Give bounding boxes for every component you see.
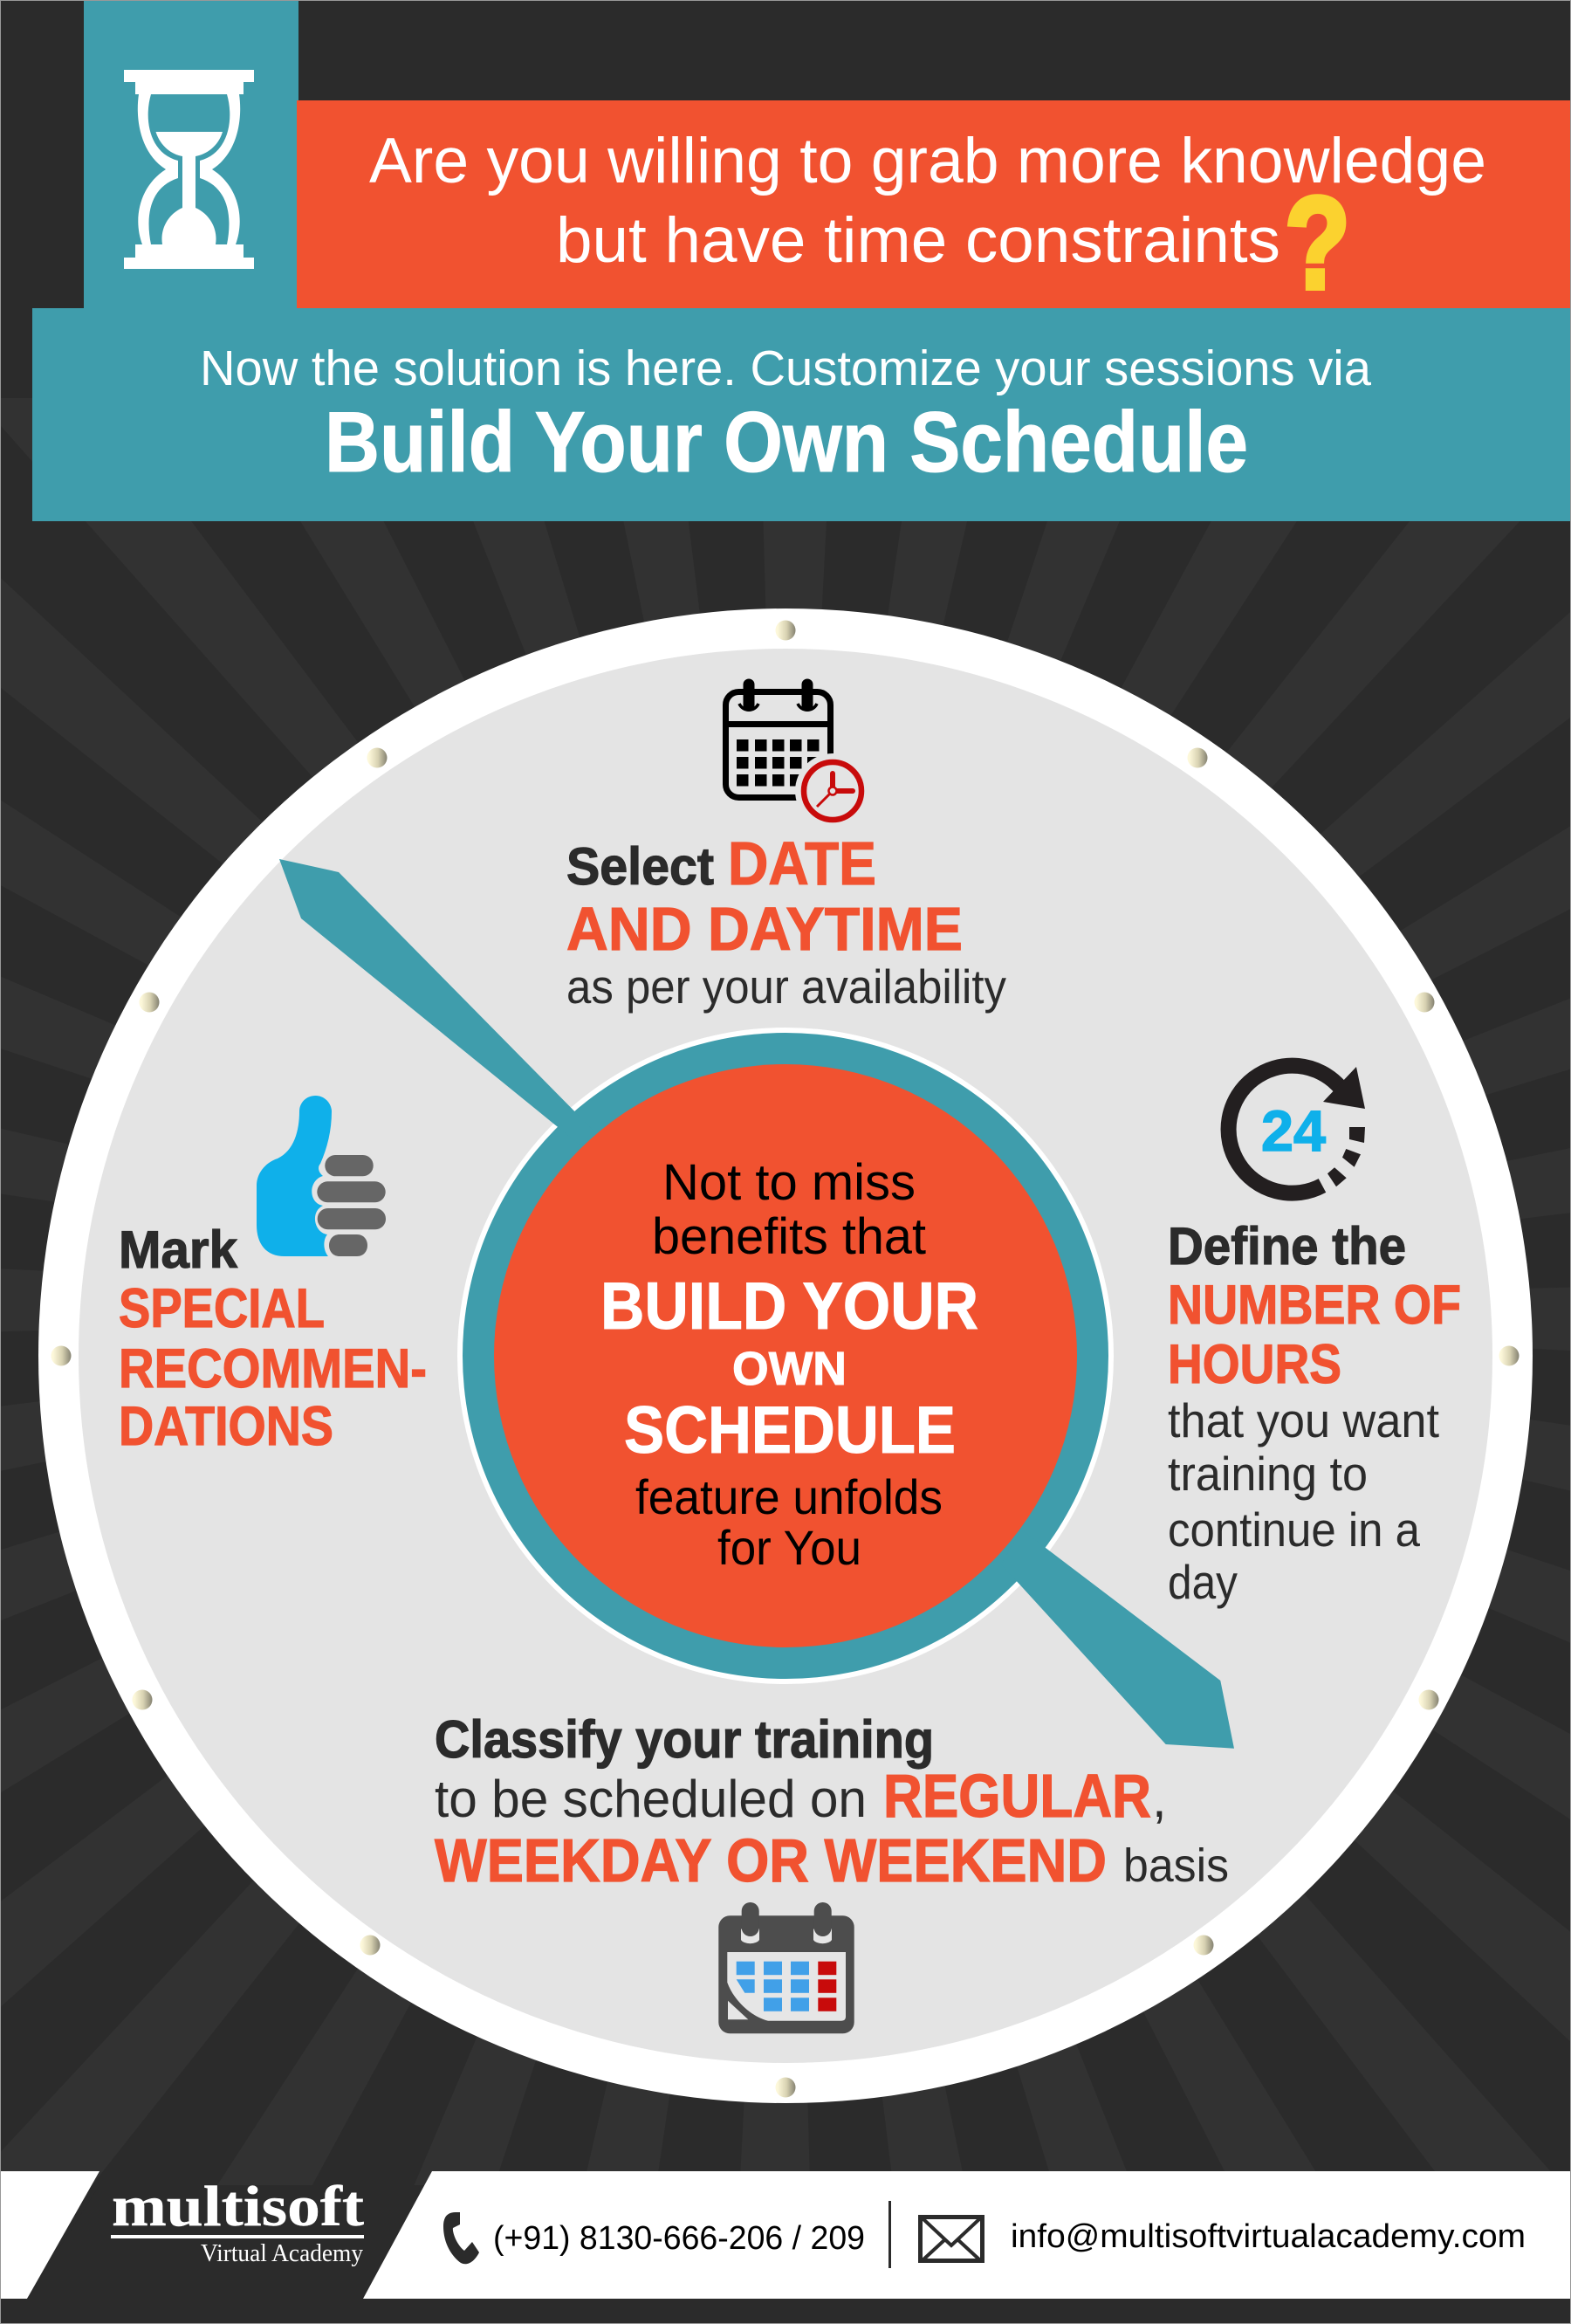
logo: multisoft bbox=[112, 2175, 364, 2238]
description: regular bbox=[435, 1762, 1167, 1830]
footer bbox=[0, 2171, 1571, 2324]
description: hours: training to bbox=[1168, 1447, 1368, 1501]
center text: SCHEDULE bbox=[624, 1393, 956, 1468]
section: recommendations: RECOMMEN- bbox=[119, 1338, 427, 1399]
center text: feature unfolds bbox=[635, 1469, 943, 1524]
description: availability: as per your availability bbox=[566, 959, 1006, 1014]
section: select date: AND DAYTIME bbox=[566, 895, 963, 963]
description: weekday or weekend: WEEKDAY OR WEEKEND bbox=[435, 1826, 1107, 1894]
section: select date: DATE bbox=[728, 829, 876, 897]
section: number of hours bbox=[1168, 1066, 1461, 1609]
section: number of hours: HOURS bbox=[1168, 1334, 1341, 1395]
description: hours: continue in a bbox=[1168, 1502, 1420, 1557]
section: recommendations: SPECIAL bbox=[119, 1278, 325, 1339]
center text: for You bbox=[717, 1520, 861, 1575]
section: number of hours: NUMBER OF bbox=[1168, 1275, 1461, 1336]
center text bbox=[600, 1154, 978, 1575]
icon: phone bbox=[443, 2212, 479, 2264]
logo bbox=[111, 2175, 364, 2267]
section: recommendations: DATIONS bbox=[119, 1396, 333, 1457]
heading: classify: Classify your training bbox=[435, 1710, 934, 1769]
heading: select date: Select bbox=[566, 837, 714, 896]
icon panel: hourglass bbox=[84, 0, 298, 308]
logo: Virtual Academy bbox=[201, 2239, 363, 2267]
icon: calendar colour bbox=[718, 1902, 854, 2033]
phone number: (+91) 8130-666-206 / 209 bbox=[493, 2220, 865, 2257]
section: select date bbox=[566, 679, 1006, 1014]
heading: special recommendations: Mark bbox=[119, 1220, 238, 1279]
title line 1: Are you willing to grab more knowledge bbox=[369, 126, 1486, 196]
rivets bbox=[51, 620, 1519, 2097]
icon: 24 hours: 24 bbox=[1261, 1098, 1326, 1163]
icon: envelope bbox=[920, 2217, 983, 2261]
description: regular: to be scheduled on bbox=[435, 1770, 867, 1828]
email: info@multisoftvirtualacademy.com bbox=[1011, 2218, 1526, 2255]
clock dial panel bbox=[38, 609, 1533, 2103]
heading: number of hours: Define the bbox=[1168, 1217, 1406, 1275]
subtitle text: Now the solution is here. Customize your sessions via bbox=[200, 340, 1371, 396]
divider bbox=[888, 2201, 891, 2268]
center ring bbox=[279, 859, 1234, 1749]
subtitle heading: Build Your Own Schedule bbox=[325, 394, 1248, 490]
center text: OWN bbox=[732, 1343, 847, 1395]
subtitle band bbox=[32, 308, 1571, 521]
icon: thumbs up bbox=[257, 1096, 386, 1256]
icon: question mark: ? bbox=[1285, 169, 1350, 316]
center text: benefits that bbox=[652, 1208, 926, 1265]
section: classify training bbox=[435, 1710, 1229, 2033]
section: recommendations bbox=[119, 1096, 427, 1457]
description: hours: that you want bbox=[1168, 1393, 1439, 1447]
title line 2: but have time constraints bbox=[556, 205, 1280, 276]
icon: hourglass bbox=[124, 70, 254, 269]
clock hand: lower right bbox=[1001, 1530, 1234, 1749]
description: hours bbox=[1168, 1393, 1439, 1609]
center text: Not to miss bbox=[662, 1154, 916, 1211]
title banner bbox=[297, 100, 1571, 316]
description: regular: REGULAR bbox=[883, 1762, 1151, 1830]
icon: calendar with clock bbox=[725, 679, 870, 829]
description: weekday or weekend: basis bbox=[1123, 1839, 1229, 1892]
clock hand: upper left bbox=[279, 859, 598, 1145]
center text: BUILD YOUR bbox=[600, 1269, 978, 1344]
icon: 24 hours bbox=[1229, 1066, 1365, 1193]
description: hours: day bbox=[1168, 1555, 1238, 1609]
description: regular: , bbox=[1152, 1770, 1167, 1828]
